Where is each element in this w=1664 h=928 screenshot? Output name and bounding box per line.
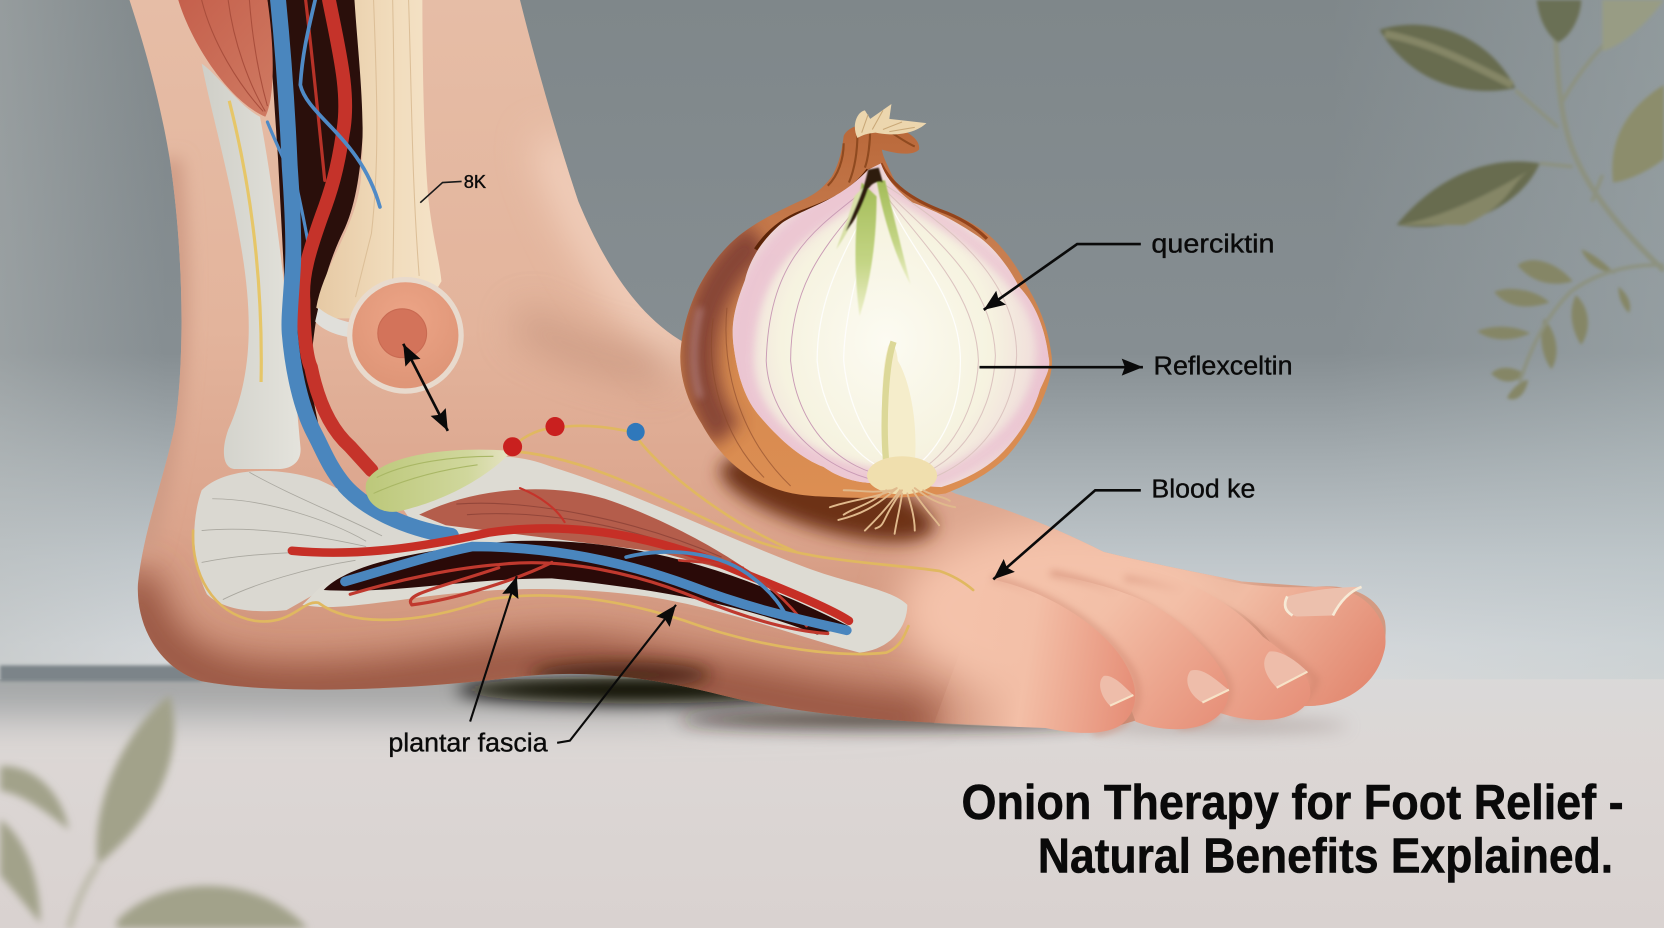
big toe [1167, 568, 1386, 706]
callout: quercıktin: querciktin [1151, 231, 1275, 259]
calcaneus fan [194, 471, 446, 611]
floor shadow under foot [456, 676, 1348, 732]
plantar fascia band [193, 417, 973, 654]
callout: Blood ke [993, 476, 1255, 579]
second toe [1045, 573, 1228, 729]
onion inner shoot [882, 344, 916, 462]
green tendon head [366, 450, 512, 512]
blue vein continuing over fan [345, 486, 451, 536]
leg vessels [267, 0, 380, 486]
red nerve dot 2 [545, 417, 565, 436]
foot and leg [129, 0, 1386, 733]
big toe nail [1285, 587, 1362, 617]
callout: plantar fascia: plantar fascia [388, 729, 548, 757]
yellow nerve lines [193, 426, 973, 654]
heel bursa [347, 277, 464, 394]
title [961, 776, 1624, 883]
onion roots [830, 488, 955, 534]
onion half [680, 104, 1052, 534]
small toe nail [1100, 676, 1133, 706]
callout: plantar fascia [388, 576, 676, 757]
calf muscle [178, 0, 273, 117]
double-headed arrow [403, 344, 448, 431]
background wall [0, 0, 1664, 681]
decorative leaves top right [1380, 0, 1664, 399]
callout: quercıktin [984, 231, 1275, 310]
floor [0, 647, 1664, 928]
blue nerve dot [627, 423, 645, 441]
onion green core streak [836, 168, 911, 316]
callout: Blood ke: Blood ke [1151, 476, 1255, 504]
callout: Reflexceltin: Reflexceltin [1154, 353, 1293, 381]
small toe [934, 578, 1135, 733]
third toe [1104, 560, 1310, 720]
callout: 8K: 8K [464, 172, 486, 192]
red nerve dot 1 [503, 437, 522, 456]
cream tendon [316, 0, 441, 318]
onion skin [680, 124, 1052, 498]
onion cut face [733, 163, 1049, 487]
decorative leaves bottom left [0, 695, 308, 928]
foot vessels [292, 488, 849, 634]
callout: 8K [420, 172, 486, 203]
title: Onion Therapy for Foot Relief - [961, 776, 1624, 830]
title: Natural Benefits Explained. [1038, 829, 1613, 883]
leg anatomy [178, 0, 464, 486]
onion layers [741, 180, 1045, 486]
tendon strap [315, 308, 356, 337]
onion tuft [855, 104, 926, 138]
onion basal plate [867, 456, 937, 495]
third toe nail [1264, 651, 1307, 688]
second toe nail [1187, 670, 1229, 702]
